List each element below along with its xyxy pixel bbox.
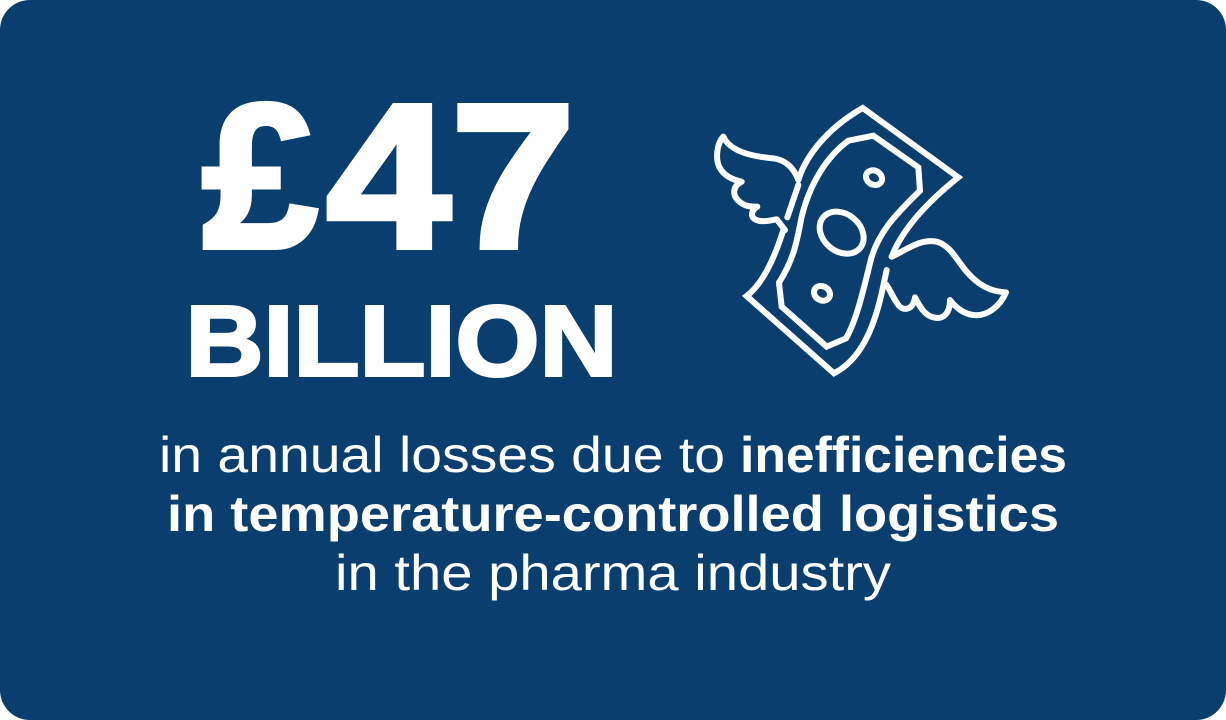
icon part: outer banknote outline <box>747 108 958 373</box>
icon part: banknote circles <box>811 167 885 304</box>
text line 3: in the pharma industry <box>335 545 891 601</box>
text block: description <box>159 427 1067 601</box>
headline figure: £47: £ <box>202 62 318 291</box>
text line 1: inefficiencies <box>740 427 1067 483</box>
icon part: left wing <box>717 137 798 230</box>
text line 1 <box>159 427 1067 483</box>
text line 1: in annual losses due to <box>159 427 725 483</box>
headline figure: £47: 7 <box>451 62 575 291</box>
text line 2: in temperature-controlled logistics <box>167 486 1059 542</box>
icon part: right wing <box>887 241 1006 318</box>
icon: flying banknote with wings <box>717 108 1006 373</box>
headline word: BILLION: BILLION <box>186 286 618 398</box>
headline figure: £47 <box>202 62 575 291</box>
icon part: inner banknote outline <box>779 136 920 347</box>
headline figure: £47: 4 <box>326 62 450 291</box>
